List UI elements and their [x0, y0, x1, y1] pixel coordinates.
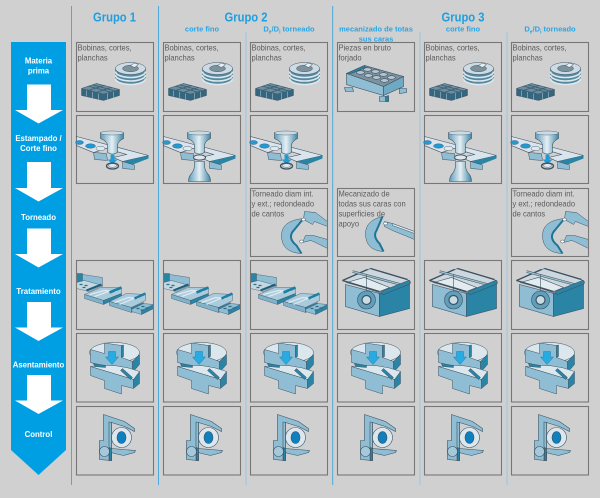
- white arrow 3: [15, 228, 63, 268]
- subheading: De/Di torneado: torneado: [541, 24, 576, 34]
- subheading: De/Di torneado: D: [263, 24, 269, 34]
- panel: raw material, column 3: Bobinas, cortes,: [251, 43, 306, 53]
- panel: turning, column 3: y ext.; redondeado: [251, 199, 314, 209]
- panel: stamping, column 3: [250, 116, 328, 184]
- panel: full machining, column 4: Mecanizado de: [338, 189, 390, 199]
- subheading: De/Di torneado: torneado: [280, 24, 315, 34]
- subheading: corte fino: corte fino: [185, 24, 220, 34]
- panel: control, column 2: [164, 406, 240, 475]
- panel: treatment line, column 2: [164, 260, 240, 330]
- panel: treatment line, column 1: [76, 260, 154, 330]
- white arrow 4: [15, 302, 63, 341]
- panel: seating, column 6: [512, 334, 588, 402]
- panel: control, column 1: [76, 406, 154, 475]
- panel: control, column 3: [250, 406, 328, 475]
- panel: raw material, column 3: [250, 42, 328, 112]
- white arrow 2: [15, 162, 63, 202]
- panel: seating, column 4: [338, 334, 414, 402]
- panel: forged blanks, column 4: forjado: [338, 53, 362, 63]
- subheading: corte fino: corte fino: [446, 24, 481, 34]
- step label: Estampado / Corte fino: Corte fino: [20, 144, 57, 153]
- panel: control, column 5: [424, 406, 502, 475]
- panel: turning, column 3: de cantos: [251, 209, 284, 219]
- subheading: De/Di torneado: e: [530, 30, 533, 36]
- step label: Materia prima: prima: [28, 66, 50, 76]
- panel: fine cutting, column 2: [162, 116, 240, 184]
- heading: Grupo 2: Grupo 2: [224, 10, 268, 24]
- panel: raw material, column 2: planchas: [164, 53, 195, 63]
- white arrow 5: [15, 375, 63, 414]
- process flow arrow: [11, 42, 66, 475]
- step label: Tratamiento: Tratamiento: [16, 287, 61, 296]
- panel: seating, column 1: [76, 334, 154, 402]
- panel: forged blanks, column 4: Piezas en bruto: [338, 43, 391, 53]
- panel: turning, column 6: y ext.; redondeado: [512, 199, 575, 209]
- step label: Torneado: Torneado: [21, 213, 56, 222]
- panel: forged blanks, column 4: [338, 42, 414, 112]
- panel: raw material, column 5: [424, 42, 502, 112]
- panel: turning, column 6: Torneado diam int.: [512, 189, 575, 199]
- panel: raw material, column 5: Bobinas, cortes,: [425, 43, 480, 53]
- panel: turning, column 3: [250, 188, 328, 256]
- icon: crate of forged blanks: [344, 66, 406, 102]
- subheading: mecanizado de totas sus caras: mecanizado de totas: [339, 24, 413, 34]
- panel: treatment tank, column 6: [512, 260, 588, 330]
- subheading: De/Di torneado: e: [269, 30, 272, 36]
- panel: full machining, column 4: superficies de: [338, 209, 386, 219]
- panel: full machining, column 4: todas sus caras con: [338, 199, 406, 209]
- panel: raw material, column 1: [76, 42, 154, 112]
- group divider lines: [72, 6, 507, 485]
- step label: Materia prima: Materia: [25, 56, 52, 66]
- heading: Grupo 1: Grupo 1: [93, 10, 136, 24]
- panel: seating, column 3: [250, 334, 328, 402]
- panel: raw material, column 1: Bobinas, cortes,: [77, 43, 132, 53]
- panel: treatment tank, column 4: [338, 260, 414, 330]
- panel: raw material, column 2: [164, 42, 240, 112]
- heading: Grupo 3: Grupo 3: [442, 10, 484, 24]
- panel: seating, column 5: [424, 334, 502, 402]
- panel: stamping, column 6: [510, 116, 588, 184]
- panel: raw material, column 1: planchas: [77, 53, 108, 63]
- panel: raw material, column 2: Bobinas, cortes,: [164, 43, 219, 53]
- subheading: De/Di torneado: D: [524, 24, 530, 34]
- panel: turning, column 6: [512, 188, 588, 256]
- white arrow 1: [15, 84, 63, 124]
- subheading: De/Di torneado: /D: [272, 24, 280, 34]
- panel: full machining, column 4: [338, 188, 414, 256]
- panel: raw material, column 5: planchas: [425, 53, 456, 63]
- panel: control, column 4: [338, 406, 414, 475]
- panel: raw material, column 6: [512, 42, 588, 112]
- panel: turning, column 3: Torneado diam int.: [251, 189, 314, 199]
- panel: treatment line, column 3: [250, 260, 328, 330]
- panel: treatment tank, column 5: [424, 260, 502, 330]
- subheading: De/Di torneado: /D: [533, 24, 541, 34]
- panel: raw material, column 6: planchas: [512, 53, 543, 63]
- subheading: mecanizado de totas sus caras: sus caras: [359, 34, 393, 44]
- panel: full machining, column 4: apoyo: [338, 219, 359, 229]
- panel: turning, column 6: de cantos: [512, 209, 545, 219]
- subheading: De/Di torneado: i: [279, 30, 281, 36]
- subheading: De/Di torneado: i: [540, 30, 542, 36]
- step label: Asentamiento: Asentamiento: [13, 360, 65, 370]
- step label: Estampado / Corte fino: Estampado /: [15, 134, 62, 143]
- step label: Control: Control: [25, 430, 52, 439]
- panel: stamping, column 1: [76, 116, 154, 184]
- panel: fine cutting, column 5: [424, 116, 502, 184]
- panel: raw material, column 3: planchas: [251, 53, 282, 63]
- panel: raw material, column 6: Bobinas, cortes,: [512, 43, 567, 53]
- panel: seating, column 2: [164, 334, 240, 402]
- panel: control, column 6: [512, 406, 588, 475]
